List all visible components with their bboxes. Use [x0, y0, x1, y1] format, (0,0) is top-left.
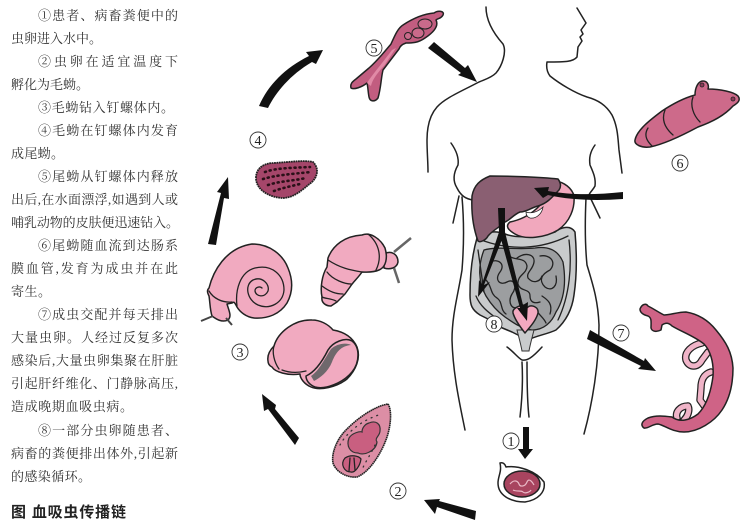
text block: transmission steps: ⑧一部分虫卵随患者、	[38, 423, 178, 438]
circled number 2: 2	[394, 485, 402, 500]
circled number 8	[486, 316, 502, 333]
organ: liver	[472, 176, 560, 242]
arrow: body to 1	[518, 427, 533, 459]
organ: bladder	[513, 305, 538, 333]
circled number 2	[390, 483, 406, 500]
text block: transmission steps: 成尾蚴。	[11, 146, 64, 161]
text block: transmission steps: ④毛蚴在钉螺体内发育	[38, 123, 178, 138]
circled number 5: 5	[370, 42, 378, 57]
circled number 6	[672, 155, 688, 172]
circled number 1	[503, 433, 519, 450]
arrow: 7	[587, 330, 656, 371]
circled number 3	[232, 344, 248, 361]
stage 3: elongated snail	[321, 234, 411, 306]
text block: transmission steps: 寄生。	[11, 284, 51, 299]
organ: stomach	[508, 181, 574, 237]
circled number 4	[250, 132, 266, 149]
text block: transmission steps: 的感染循环。	[11, 469, 91, 484]
arrows from liver to intestine	[478, 208, 528, 321]
circled number 7	[613, 325, 629, 342]
text block: transmission steps: ②虫卵在适宜温度下	[38, 54, 178, 69]
stage 4: sporocyst	[256, 161, 317, 198]
text block: transmission steps: 病畜的粪便排出体外,引起新	[11, 446, 178, 461]
arrow: 3 to 4	[208, 177, 229, 245]
text block: transmission steps: ⑥尾蚴随血流到达肠系	[38, 238, 178, 253]
circled number 3: 3	[236, 346, 244, 361]
text block: transmission steps: 感染后,大量虫卵集聚在肝脏	[11, 353, 178, 368]
text block: transmission steps: ①患者、病畜粪便中的	[38, 8, 178, 23]
arrow: 4 to 5	[259, 50, 323, 108]
arrow: 1 to 2	[424, 499, 476, 520]
organ: large intestine	[470, 227, 576, 340]
text block: transmission steps: 哺乳动物的皮肤便迅速钻入。	[11, 215, 179, 230]
text block: transmission steps	[11, 8, 179, 484]
circled number 8: 8	[490, 318, 498, 333]
arrow: 5 to body	[428, 42, 477, 82]
organ: rectum	[517, 330, 534, 351]
circled number 5	[366, 40, 382, 57]
text block: transmission steps: ⑦成虫交配并每天排出	[38, 307, 178, 322]
text block: transmission steps: 出后,在水面漂浮,如遇到人或	[11, 192, 178, 207]
figure caption: 图 血吸虫传播链	[11, 503, 126, 521]
circled number 6: 6	[676, 157, 684, 172]
text block: transmission steps: 造成晚期血吸虫病。	[11, 399, 133, 414]
stage 2: miracidium	[333, 404, 391, 477]
text block: transmission steps: 引起肝纤维化、门静脉高压,	[11, 376, 178, 391]
stage 7: paired adult worms	[640, 304, 733, 432]
text block: transmission steps: ③毛蚴钻入钉螺体内。	[38, 100, 174, 115]
text block: transmission steps: 孵化为毛蚴。	[11, 77, 89, 92]
stage 1: egg	[498, 463, 544, 502]
organ: small intestine	[476, 236, 570, 330]
circled number 7: 7	[618, 327, 624, 342]
arrow: 2 to 3	[262, 394, 299, 445]
text block: transmission steps: 膜血管,发育为成虫并在此	[11, 261, 178, 276]
stage 6: adult worm	[635, 81, 739, 147]
text block: transmission steps: 大量虫卵。人经过反复多次	[11, 330, 178, 345]
circled number 1: 1	[508, 435, 514, 450]
text block: transmission steps: 虫卵进入水中。	[11, 31, 102, 46]
text block: transmission steps: ⑤尾蚴从钉螺体内释放	[38, 169, 178, 184]
stage 5: cercaria	[351, 11, 443, 101]
human body outline	[427, 7, 622, 434]
circled number 4: 4	[254, 134, 262, 149]
arrow: 6 to liver	[534, 187, 623, 200]
organ: gap between liver and stomach	[526, 207, 543, 218]
stage 3: spiral snail	[201, 244, 292, 325]
stage 3: round shell	[268, 320, 358, 389]
